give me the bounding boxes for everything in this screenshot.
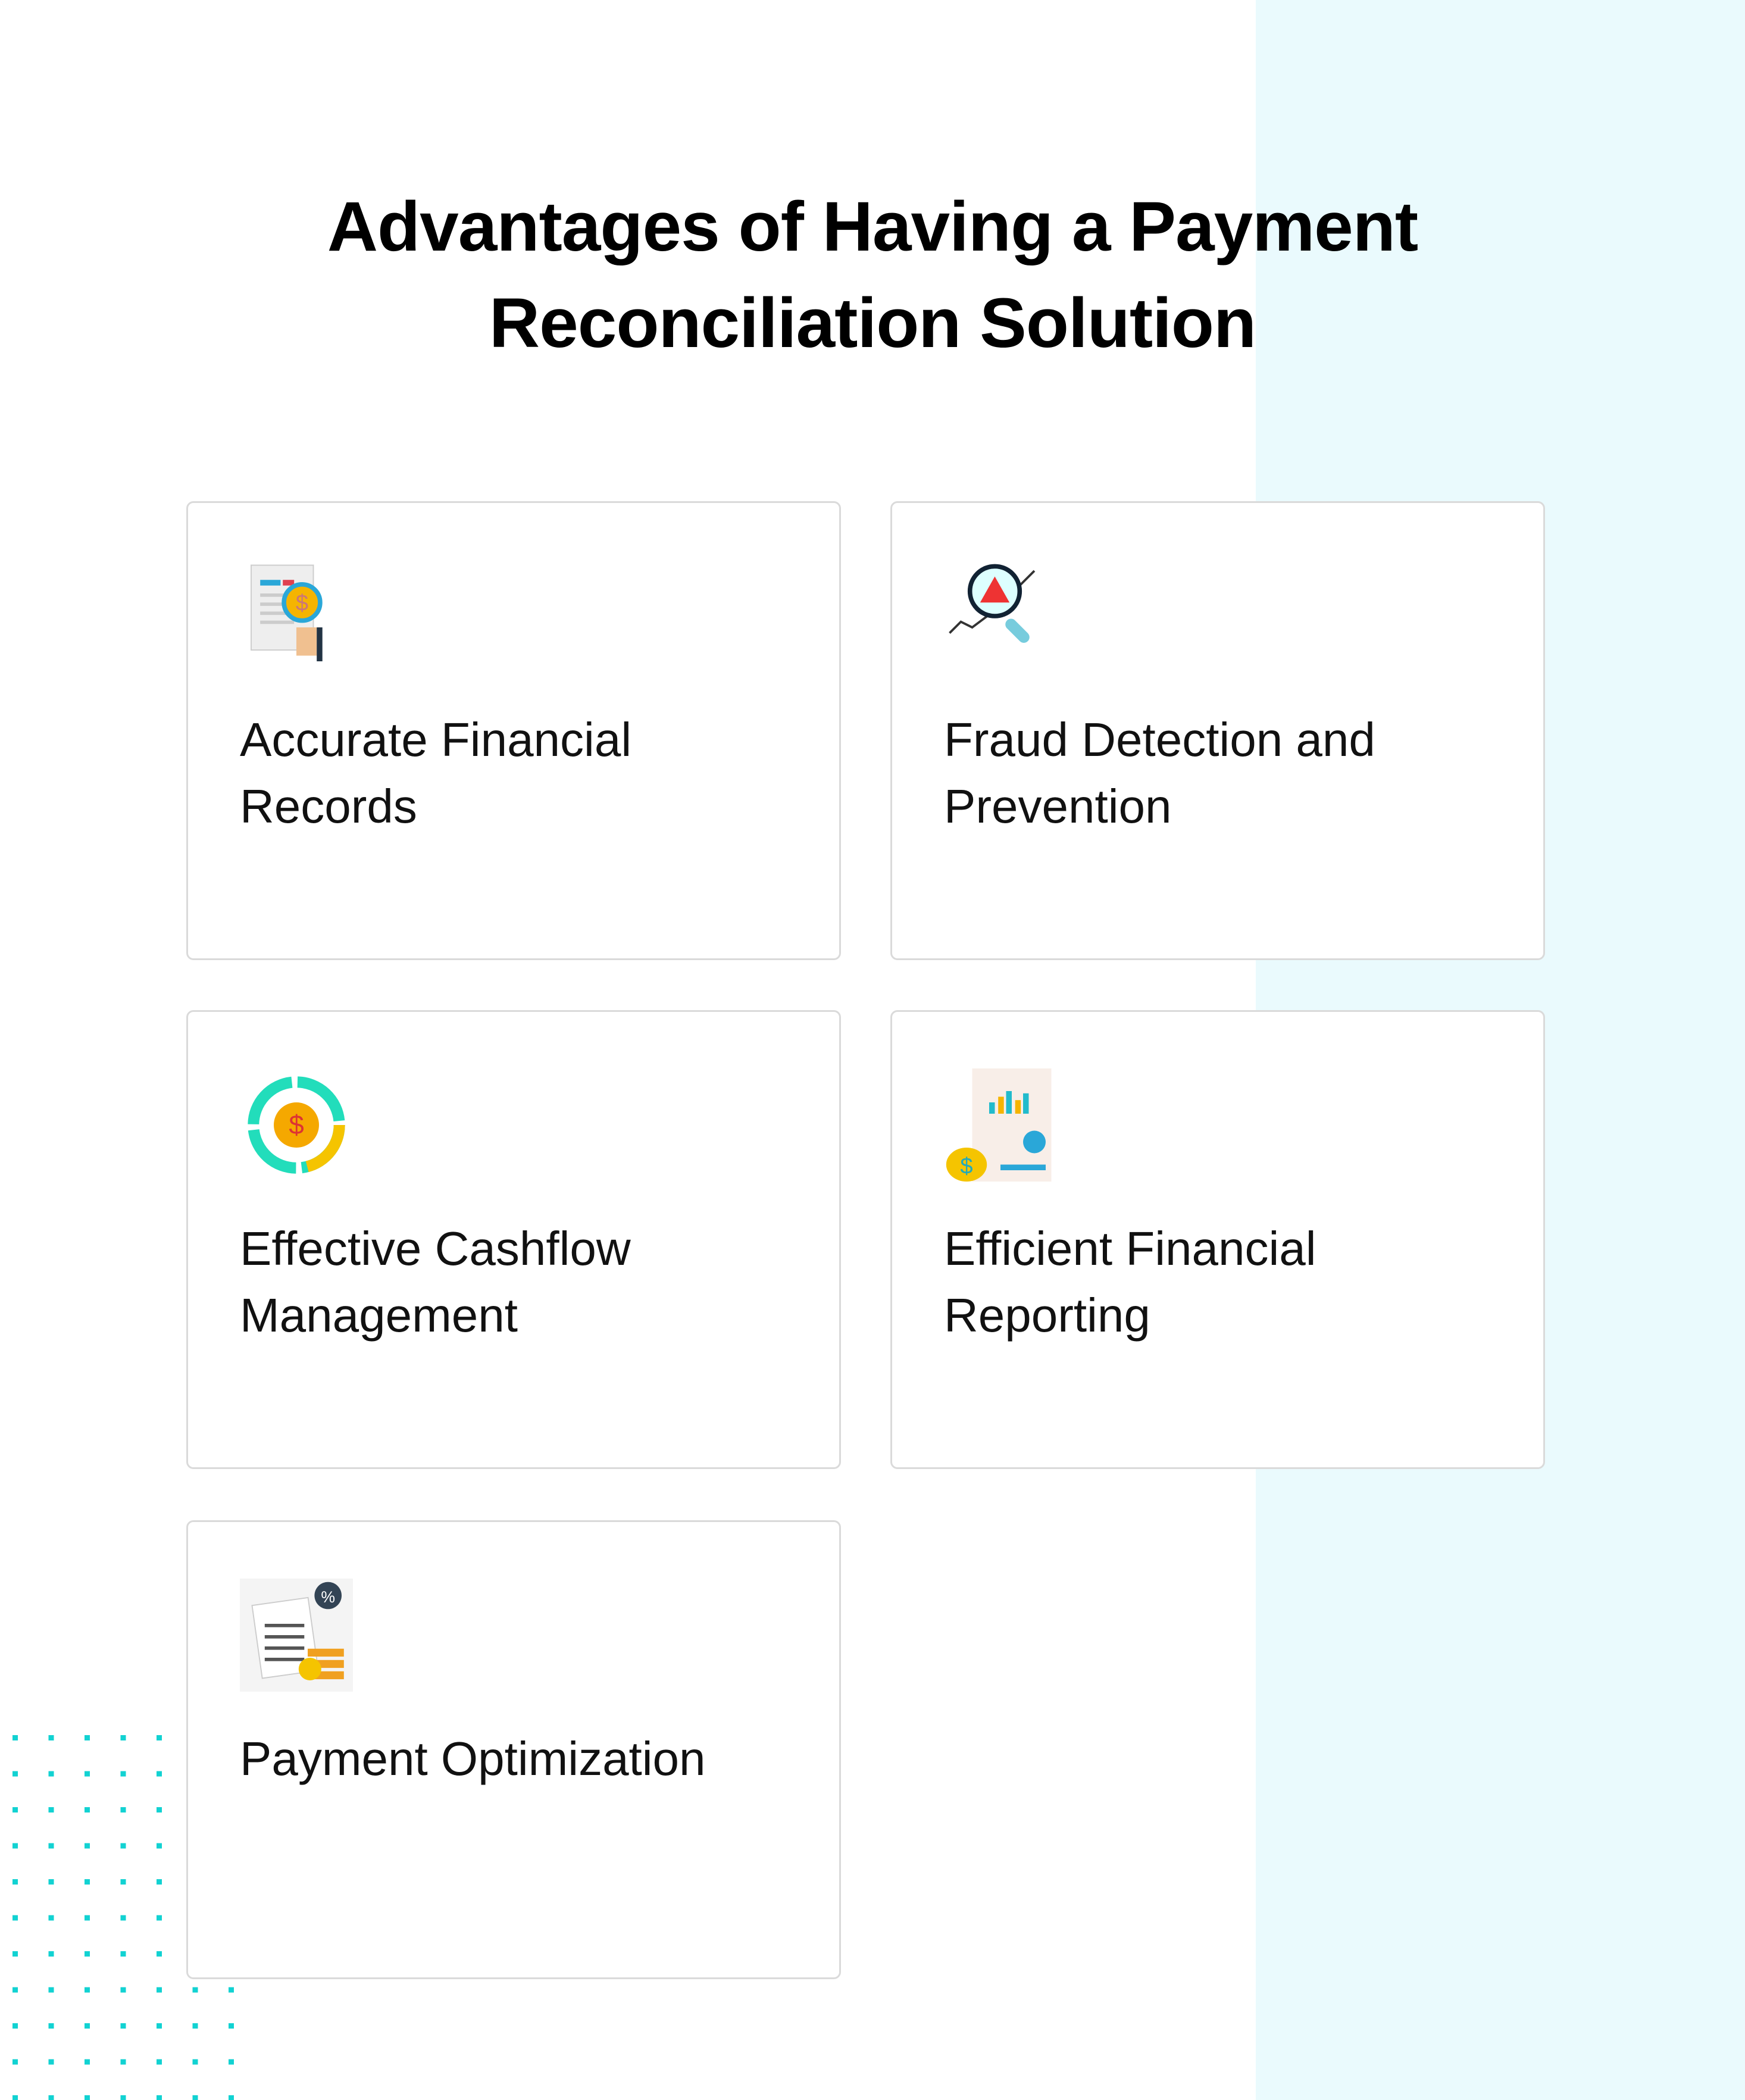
icon: invoice coins: % — [321, 1588, 335, 1606]
text: Effective Cashflow — [240, 1222, 631, 1275]
text: Fraud Detection and — [944, 713, 1375, 766]
text: Accurate Financial — [240, 713, 631, 766]
text: Reporting — [944, 1289, 1150, 1342]
dot pattern — [12, 1735, 234, 2100]
background panel — [1256, 0, 1745, 2100]
card: reporting — [890, 1010, 1545, 1469]
card: payment optimization — [186, 1520, 841, 1979]
text — [944, 713, 1375, 833]
text — [240, 1222, 631, 1342]
text: Prevention — [944, 780, 1171, 833]
icon: report chart — [946, 1068, 1051, 1182]
card: cashflow — [186, 1010, 841, 1469]
icon: magnifier alert — [949, 564, 1036, 643]
text: Efficient Financial — [944, 1222, 1316, 1275]
title: Reconciliation Solution — [489, 284, 1256, 362]
title — [327, 188, 1418, 362]
text: Management — [240, 1289, 518, 1342]
icon: document magnifier: $ — [296, 591, 308, 616]
title: Advantages of Having a Payment — [327, 188, 1418, 266]
icon: cycle coin: $ — [289, 1110, 304, 1140]
text — [944, 1222, 1316, 1342]
card: fraud detection — [890, 501, 1545, 960]
icon: report chart: $ — [960, 1154, 973, 1179]
text: Records — [240, 780, 417, 833]
icon: invoice coins — [240, 1579, 353, 1692]
text: Payment Optimization — [240, 1732, 706, 1785]
icon: document magnifier — [251, 564, 323, 661]
icon: cycle coin — [248, 1076, 345, 1174]
card: accurate financial records — [186, 501, 841, 960]
text — [240, 713, 631, 833]
